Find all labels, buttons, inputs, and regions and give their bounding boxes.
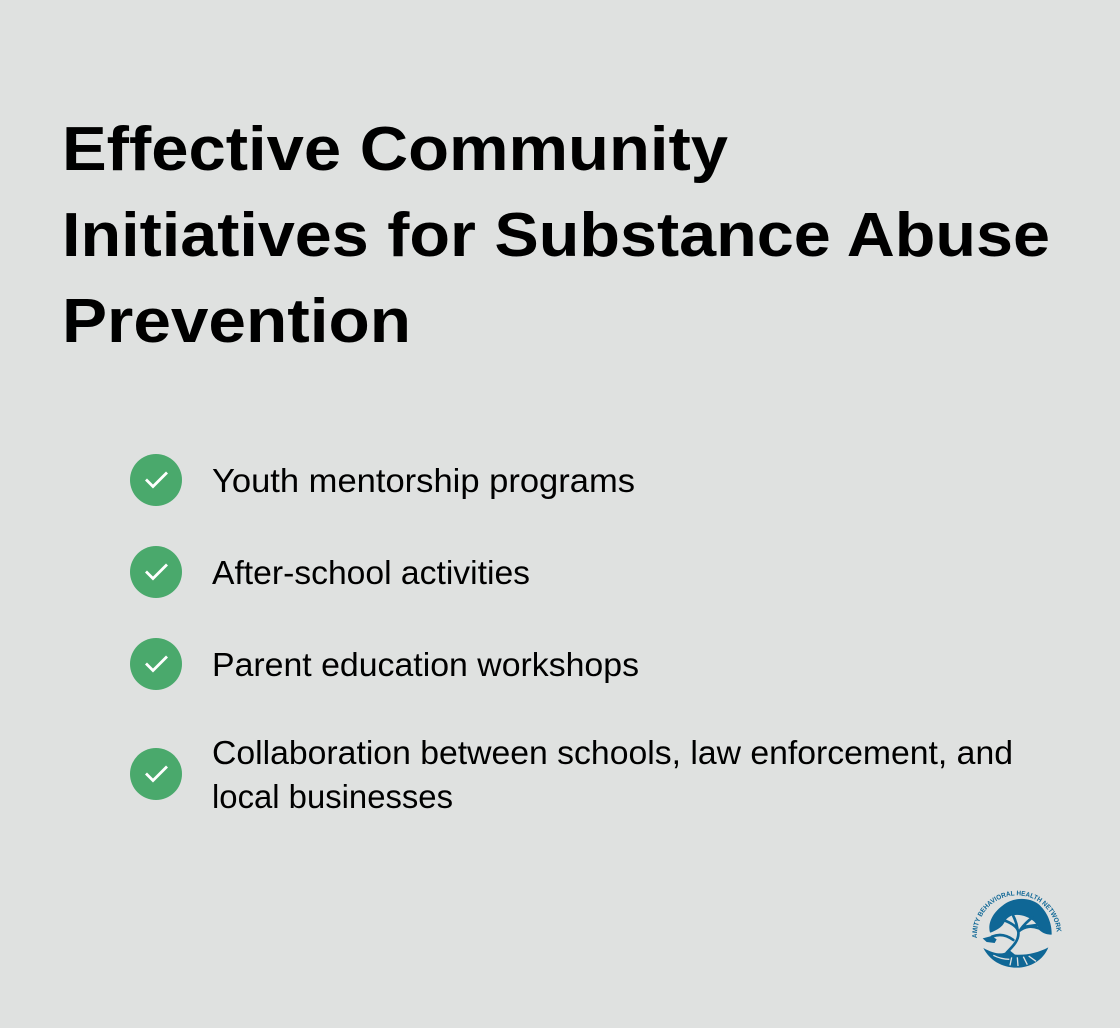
item: after-school activities: [130, 546, 530, 598]
roots bowl: [983, 947, 1048, 968]
title: Initiatives for Substance Abuse: [62, 201, 1050, 270]
icon: tree drawing: [983, 899, 1052, 968]
item: after-school activities: After-school activities: [212, 554, 530, 591]
item: collaboration: [130, 734, 1013, 815]
logo ring text: AMITY BEHAVIORAL HEALTH NETWORK: [972, 890, 1062, 938]
item: parent education workshops: [130, 638, 639, 690]
item: parent education workshops: Parent education workshops: [212, 646, 639, 683]
title: Prevention: [62, 287, 411, 356]
item: collaboration: Collaboration between schools, law enforcement, and: [212, 734, 1013, 771]
title: Effective Community: [62, 115, 729, 184]
title: [62, 115, 1050, 356]
item: youth mentorship programs: Youth mentorship programs: [212, 462, 635, 499]
branches: [992, 916, 1047, 953]
item: youth mentorship programs: [130, 454, 635, 506]
item: collaboration: local businesses: [212, 778, 453, 815]
checklist: [130, 454, 1013, 815]
root gaps: [993, 955, 1036, 966]
leaf cluster: [983, 936, 997, 943]
tree canopy: [989, 899, 1052, 935]
logo: Amity Behavioral Health Network: [972, 890, 1062, 968]
